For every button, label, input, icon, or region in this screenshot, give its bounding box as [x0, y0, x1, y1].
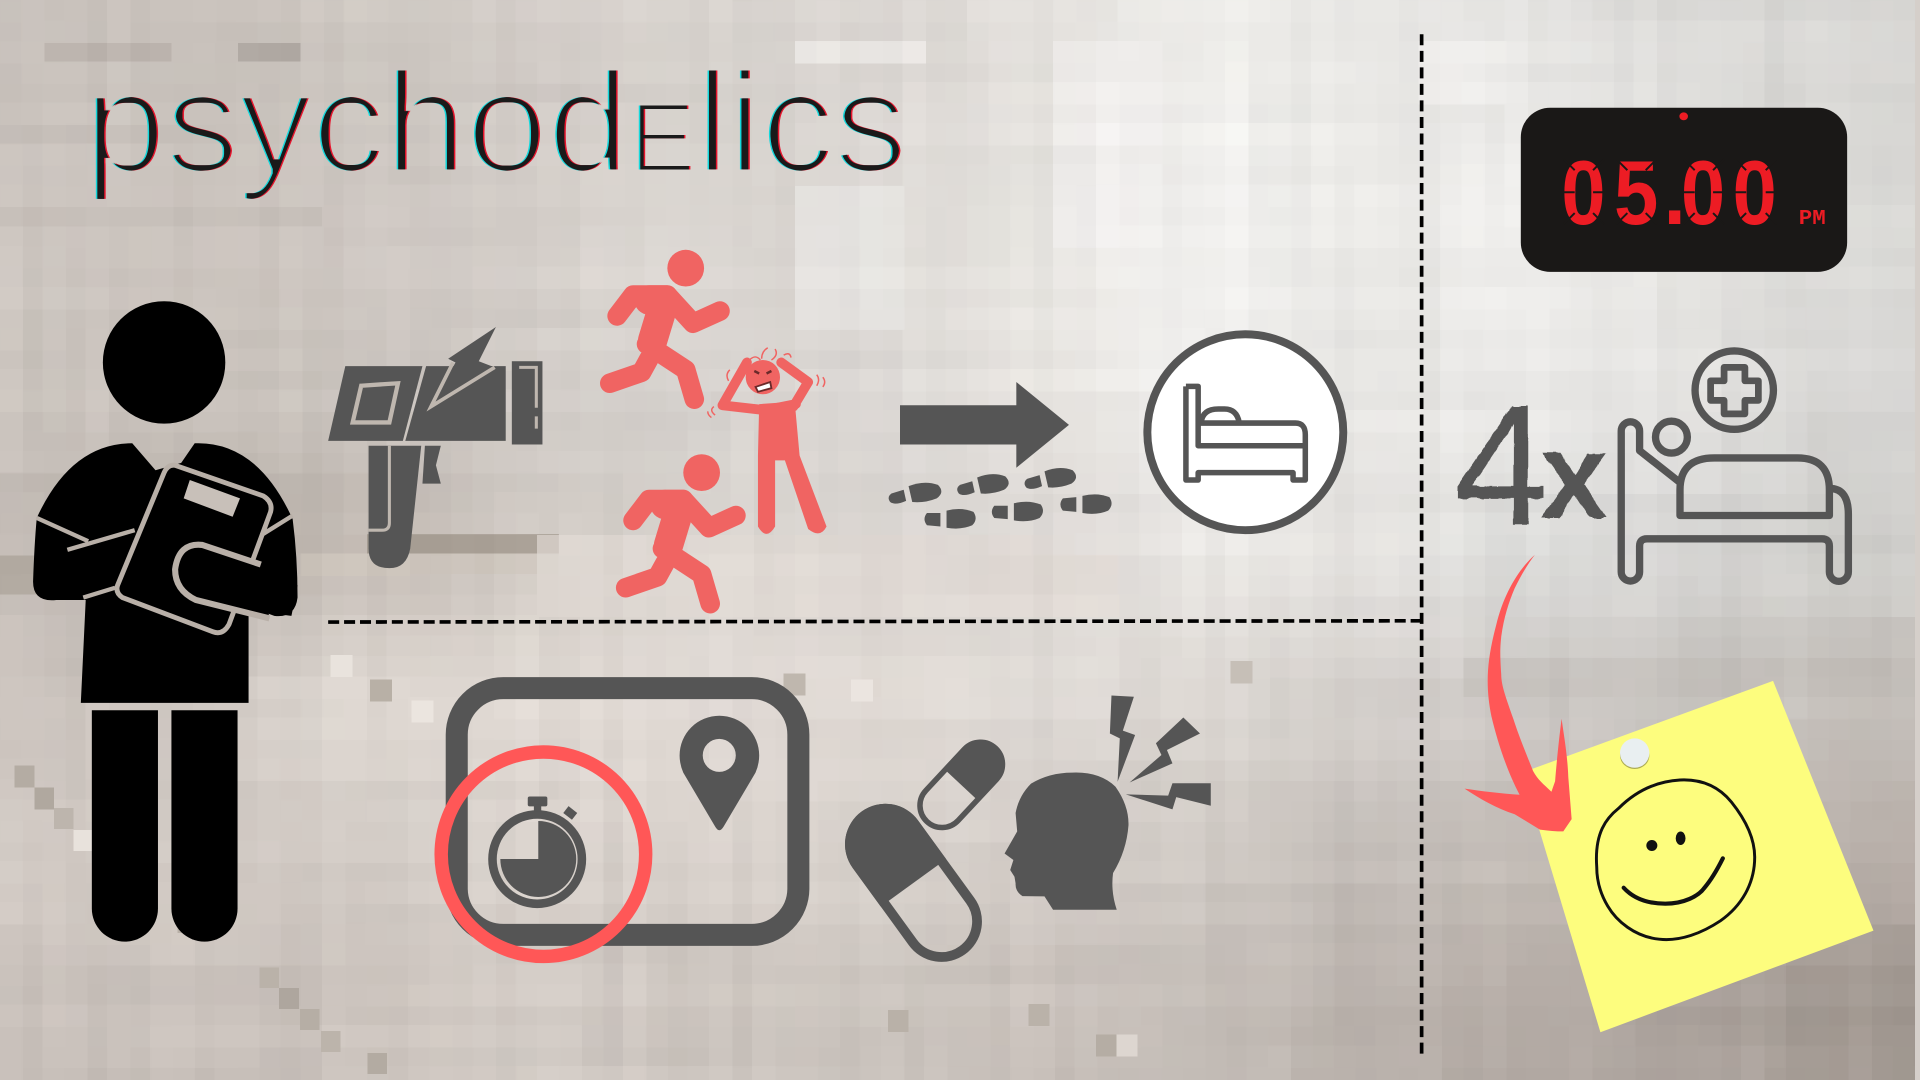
left leg — [92, 710, 158, 942]
hand outline — [175, 545, 269, 618]
gun body — [405, 366, 506, 441]
nurse figure with clipboard — [33, 301, 298, 942]
torso and arms — [33, 443, 298, 703]
icon: large capsule — [845, 804, 982, 962]
sticky note with smiley — [1522, 681, 1873, 1032]
right leg — [171, 710, 238, 942]
icon: bed in circle — [1147, 334, 1343, 530]
title: psychodElics: psychodElics — [84, 43, 907, 202]
panicked head — [746, 360, 780, 394]
icon: small capsule — [917, 740, 1006, 830]
handwritten 4x — [1453, 369, 1609, 562]
icon: map frame — [457, 688, 798, 935]
pin — [1620, 742, 1649, 769]
digital clock — [1521, 108, 1847, 272]
divider: vertical dashed line — [1420, 34, 1423, 1054]
panicked face — [754, 371, 771, 373]
icon: taser gun — [328, 327, 542, 568]
divider: horizontal dashed line — [328, 621, 1420, 622]
handwritten 4x: 4 — [1453, 369, 1549, 562]
gun rear block — [328, 366, 422, 441]
hair and shake marks — [708, 348, 825, 418]
red curved arrow — [1464, 555, 1572, 831]
handwritten 4x: x — [1540, 407, 1609, 544]
icon: running person top — [610, 250, 720, 399]
icon: location pin — [680, 716, 759, 830]
sleeve lines — [37, 516, 293, 598]
icon: panicked person — [708, 348, 827, 534]
icon: head with headache bolts — [1005, 696, 1211, 910]
gun trigger — [422, 446, 441, 484]
smiley eyes — [1646, 840, 1657, 851]
clock indicator dot — [1679, 112, 1688, 120]
smiley outline — [1596, 780, 1755, 940]
clipboard — [117, 465, 271, 633]
clock pm label: PM — [1799, 208, 1826, 231]
lightning bolt — [431, 327, 496, 407]
icon: patient in hospital bed — [1621, 351, 1848, 581]
clock body — [1521, 108, 1847, 272]
arrow pointing right — [900, 382, 1069, 468]
gun handle — [369, 446, 421, 568]
bed frame — [1621, 422, 1848, 581]
clock time: 05.00 — [1561, 143, 1777, 244]
panicked arms — [722, 362, 808, 410]
gun muzzle — [512, 361, 542, 444]
red ring highlight — [441, 752, 646, 956]
white circle — [1147, 334, 1343, 530]
icon: footprints — [889, 468, 1112, 529]
yellow note — [1522, 681, 1873, 1032]
bolt two — [1130, 718, 1200, 782]
panicked body — [758, 402, 827, 534]
head silhouette — [1005, 773, 1129, 910]
icon: stopwatch — [492, 797, 582, 904]
bolt one — [1110, 696, 1135, 782]
medical cross badge — [1695, 351, 1773, 429]
bed outline — [1186, 386, 1305, 480]
smiley mouth — [1624, 858, 1723, 904]
blanket — [1680, 458, 1829, 516]
head — [103, 301, 225, 424]
patient head — [1656, 421, 1687, 453]
bolt three — [1126, 783, 1211, 809]
gun screen — [353, 383, 398, 422]
icon: running person bottom — [626, 454, 736, 604]
clipboard clip — [184, 480, 240, 517]
